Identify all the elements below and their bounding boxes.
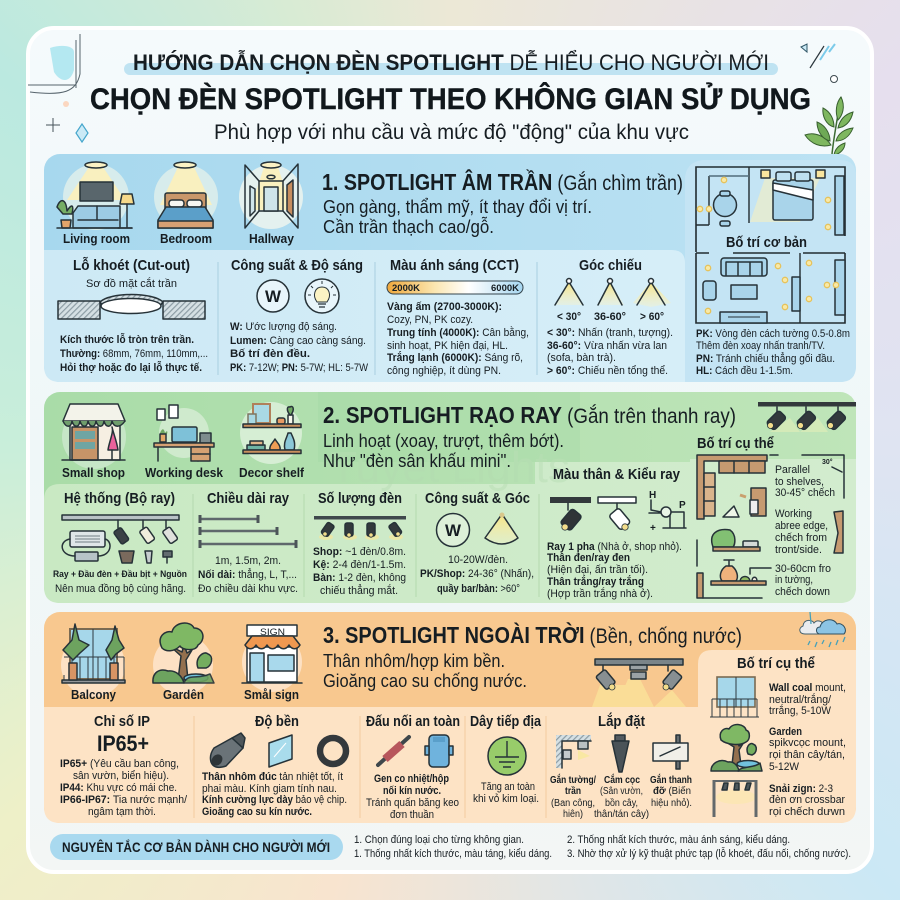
labels: beam angles [557,311,664,323]
text: safe connection: nối kín nước. [383,785,441,797]
text: number of lights: chiếu thẳng mắt. [320,584,398,597]
text: beam angle [547,327,673,377]
text: specific layout notes: to shelves, [775,476,824,488]
icon: decor shelf [240,402,302,464]
icon: leaf branch [805,97,853,155]
text: power and angle: 10-20W/đèn. [448,554,508,566]
column: number of lights [313,490,406,597]
icon: wiring [649,490,686,534]
text: ip rating: IP66-IP67: Tia nước mạnh/ [60,794,188,806]
icon: balcony [61,624,125,697]
text: ip rating: ngâm tạm thời. [88,806,156,818]
labels: beam angles: > 60° [640,311,664,323]
cct colour bar [387,281,523,294]
label: living room: Living room [63,231,130,246]
text: beam angle: > 60°: Chiếu nền tổng thể. [547,365,668,377]
text: section 1 intro: Cần trần thạch cao/gỗ. [323,216,494,237]
heading: cut-out: Lỗ khoét (Cut-out) [73,257,190,274]
icon: wiring: H [649,490,656,501]
footer pill: NGUYÊN TẮC CƠ BẢN DÀNH CHO NGƯỜI MỚI [62,838,330,855]
labels: beam angles: 36-60° [594,311,626,323]
text: safe connection [366,773,459,821]
icons: connectors [378,735,453,767]
panel: outdoor spotlight [44,612,856,823]
text: install: (Sân vườn, [600,786,643,797]
text: layout notes: trrắng, 5-10W [769,704,831,717]
sub panel: specs [44,250,685,382]
text: layout notes: PK: Vòng đèn cách tường 0.5-0.8m [696,328,850,340]
icon: garden [153,623,214,695]
text: power: Bố trí đèn đều. [230,348,310,360]
text: safe connection: đơn thuần [390,809,434,821]
icon: beam cone [485,512,518,544]
text: power [230,321,368,374]
icon: black fixture [550,497,591,531]
text: section 2 intro [323,431,564,471]
text: number of lights: Bàn: 1-2 đèn, không [313,572,406,584]
label: small shop: Small shop [62,465,125,480]
text: beam angle: 36-60°: Vừa nhấn vừa lan [547,340,667,352]
text: durability [202,771,347,818]
labels: beam angles: < 30° [557,311,581,323]
text: specific layout notes: 30-45° chếch [775,487,835,499]
text: section 2 intro: Linh hoạt (xoay, trượt, thêm bớt). [323,431,564,451]
heading block [90,49,811,144]
text: cut-out: Thường: 68mm, 76mm, 110mm,... [60,348,208,360]
subtitle: Phù hợp với nhu cầu và mức độ "động" của khu vực [214,121,689,144]
text: durability: phai màu. Kính giam tính nau. [202,783,337,795]
text: specific layout notes: abree edge, [775,520,828,532]
text: power and angle: quầy bar/bàn: >60° [437,583,520,595]
heading: section 3: 3. SPOTLIGHT NGOÀI TRỜI (Bền, chống nước) [323,621,742,648]
panel: recessed spotlight [44,154,856,382]
text: install: trần [565,785,581,797]
text: durability: Thân nhôm đúc tản nhiệt tốt, ít [202,771,344,783]
text: install: (Ban công, [551,798,595,809]
text: specific layout notes: tront/side. [775,544,822,556]
column: cut-out [58,257,208,374]
text: track length: Nối dài: thẳng, L, T,... [198,568,297,581]
icon: living room [57,162,134,230]
column: durability: Độ bền [255,713,299,730]
label: balcony: Balcony [71,687,117,702]
footer tips: 3. Nhờ thợ xử lý kỹ thuật phức tạp (lỗ khoét, đấu nối, chống nước). [567,847,851,860]
decoration: top-left lines [28,34,80,107]
icon: bedroom [154,162,218,229]
column: ip rating: Chỉ số IP [94,713,150,730]
column: track length [198,490,298,595]
icon: wiring: P [679,500,686,511]
kicker: HƯỚNG DẪN CHỌN ĐÈN SPOTLIGHT DỄ HIỂU CHO NGƯỜI MỚI [133,49,769,75]
column: track system: Hệ thống (Bộ ray) [64,490,175,507]
column: power: Công suất & Độ sáng [231,257,363,274]
diagram: shelf layout [697,455,844,553]
text: safe connection: Tránh quấn băng keo [366,797,459,809]
text: cut-out: Kích thước lỗ tròn trên trần. [60,333,194,346]
footer tips [354,834,851,860]
heading: specific layout: Bố trí cụ thể [697,435,774,452]
column: power and angle: Công suất & Góc [425,490,530,507]
footer [50,834,851,860]
icon: small sign: SIGN [260,627,285,637]
title: CHỌN ĐÈN SPOTLIGHT THEO KHÔNG GIAN SỬ DỤNG [90,82,811,116]
text: cut-out: Hỏi thợ hoặc đo lại lỗ thực tế. [60,361,202,374]
icon: watt: W [265,287,282,306]
text: layout notes: neutral/trắng/ [769,693,832,706]
text: power and angle: PK/Shop: 24-36° (Nhấn), [420,568,534,580]
icon: white fixture [598,497,636,531]
label: garden: Gardên [163,687,204,702]
text: cct: Trắng lạnh (6000K): Sáng rõ, [387,351,523,364]
icon: ground spike [612,735,629,772]
column: installation [550,712,692,820]
column: power [230,257,368,374]
text: durability: Gioăng cao su kín nước. [202,806,312,818]
column: cct [387,257,529,377]
text: section 3 intro [323,651,527,691]
column: safe connection: Đấu nối an toàn [366,713,460,730]
text: power and angle [420,554,534,595]
text: layout notes [696,328,850,377]
column: installation: Lắp đặt [598,712,645,730]
text: install: bồn cây, [605,797,638,809]
text: beam angle: (sofa, bàn trà). [547,352,616,364]
text: track system [53,569,187,595]
text: safe connection: Gen co nhiệt/hộp [374,773,449,785]
text: power: W: Ước lượng độ sáng. [230,321,337,333]
text: section 1 intro: Gọn gàng, thẩm mỹ, ít thay đổi vị trí. [323,197,592,217]
text: durability: Kính cường lực dày bảo vệ chip. [202,794,347,806]
column: cct: Màu ánh sáng (CCT) [390,257,519,274]
icon: track lengths [200,515,296,548]
column: beam angle [547,257,673,377]
text: specific layout notes: 30-60cm fro [775,563,831,575]
column: cut-out: Sơ đồ mặt cắt trần [86,277,177,290]
icon: track with spotlights [758,402,856,432]
footer tips: 1. Thống nhất kích thước, màu táng, kiểu dáng. [354,848,552,860]
label: hallway: Hallway [249,231,295,246]
text: track length: Đo chiều dài khu vực. [198,583,298,595]
text: install: hiệu nhỏ). [651,797,692,809]
icon: sign bar [653,735,688,769]
text: install: đỡ (Biến [653,785,691,797]
column: beam angle: Góc chiếu [579,257,642,274]
footer pill [50,834,343,860]
decoration: top-right marks [801,44,838,82]
text: power: Lumen: Càng cao càng sáng. [230,335,366,347]
icon: balcony layout [710,677,759,717]
icons: durable materials [209,733,346,768]
icon: bulb [305,279,339,313]
icon: hallway [239,162,303,229]
watermark: Tuyet Lights [330,443,570,492]
text: ip rating: IP44: Khu vực có mái che. [60,782,177,794]
text: beam angle: < 30°: Nhấn (tranh, tượng). [547,327,673,339]
subtitle band [124,63,778,75]
text: layout notes: Garden [769,726,802,738]
sub panel: specs [44,707,700,823]
icon: garden layout [711,725,762,771]
text: install: Cắm cọc [604,773,640,786]
lights [721,177,727,183]
diagram: shelf layout: 30° [822,458,833,466]
text: body colour: Ray 1 pha (Nhà ở, shop nhỏ). [547,541,682,553]
icon: ground symbol [488,737,526,775]
text: cct: sinh hoạt, PK hiện đại, HL. [387,340,508,352]
column: body colour: Màu thân & Kiểu ray [553,466,681,483]
text: layout notes: HL: Cách đều 1-1.5m. [696,365,793,377]
sub panel: layout [685,160,856,382]
text: layout notes: Wall coal mount, [769,682,846,694]
text: layout notes: Thêm đèn xoay nhấn tranh/TV. [696,340,825,352]
text: specific layout notes: Working [775,508,812,520]
text: install: hiên) [563,809,583,820]
text: cct: công nghiệp, ít dùng PN. [387,365,501,377]
diagram: low table [697,560,771,598]
text: number of lights: Shop: ~1 đèn/0.8m. [313,546,406,558]
icon: four lights [314,516,406,540]
text: cct: Vàng ấm (2700-3000K): [387,301,502,313]
text: section 3 intro: Thân nhôm/hợp kim bền. [323,651,505,671]
text: install: thân/tán cây) [594,809,649,820]
text: body colour: (Hợp trần trắng nhà ở). [547,587,653,600]
text: cct [387,301,529,377]
living [721,258,767,276]
panel: track spotlight [44,392,856,603]
footer tips: 2. Thống nhất kích thước, màu ánh sáng, kiểu dáng. [567,834,790,846]
text: specific layout notes: chếch down [775,586,830,598]
text: install: Gắn thanh [650,773,692,786]
column: number of lights: Số lượng đèn [318,490,402,507]
text: ground wire: Tăng an toàn [481,781,535,793]
icon: small sign [242,625,302,692]
icon: outdoor fixture [592,659,686,707]
text: section 3 intro: Gioăng cao su chống nước. [323,671,527,691]
bed [773,180,813,220]
text: body colour: (Hiện đại, ấn trần tối). [547,564,648,576]
text: body colour: Thân trắng/ray trắng [547,575,644,588]
text: power: PK: 7-12W; PN: 5-7W; HL: 5-7W [230,362,368,374]
text: ip rating: sân vườn, biển hiệu). [73,770,169,782]
dining [714,194,736,216]
icon: watt: W [445,521,462,540]
text: install: Gắn tường/ [550,773,596,786]
text: ip rating [60,758,188,818]
icon: track kit [62,515,179,563]
heading: section 2: 2. SPOTLIGHT RẠO RAY (Gắn trên thanh ray) [323,402,736,428]
icon: wiring: + [650,523,656,534]
text: cct: Trung tính (4000K): Cân bằng, [387,326,529,339]
watermark [318,392,580,492]
cct colour bar: 2000K [392,283,420,294]
text: layout notes: rọi thân cây/tán, [769,749,845,761]
text: layout notes: spikvcọc mount, [769,737,846,749]
icon: rain clouds [800,612,845,647]
icon: working desk [154,405,214,461]
label: working desk: Working desk [145,465,224,480]
label: small sign: Smål sign [244,687,299,702]
text: number of lights: Kệ: 2-4 đèn/1-1.5m. [313,559,406,571]
cct colour bar: 6000K [491,283,519,294]
column: ground wire: Dây tiếp địa [470,713,542,730]
label: decor shelf: Decor shelf [239,465,305,480]
heading: basic layout: Bố trí cơ bản [726,234,807,251]
column: safe connection [366,713,460,821]
heading: specific layout: Bố trí cụ thể [737,655,815,672]
text: install [550,773,692,820]
text: ground wire [473,781,539,805]
text: layout notes: PN: Tránh chiếu thẳng gối đầu. [696,352,835,365]
column: body colour [547,466,686,600]
icon: wall mount [556,735,591,768]
text: specific layout notes: chếch from [775,532,827,544]
decoration: sparkles left [46,118,88,142]
text: specific layout notes: Parallel [775,464,810,476]
text: track system: Ray + Đầu đèn + Đầu bịt + Nguồn [53,569,187,580]
text: layout notes [769,682,846,818]
column: power and angle [420,490,534,595]
column: ip rating [60,713,188,818]
icon: small shop [62,404,126,469]
text: cct: Cozy, PN, PK cozy. [387,314,473,326]
text: section 1 intro [323,197,592,237]
text: track length [198,555,298,595]
column: track length: Chiều dài ray [207,490,290,507]
text: body colour: Thân đen/ray đen [547,552,630,564]
text: layout notes: Snải zign: 2-3 [769,783,833,795]
heading: section 1: 1. SPOTLIGHT ÂM TRẦN (Gắn chìm trần) [322,168,683,195]
diagram: desk layout [697,530,760,566]
floor plan [696,167,845,323]
icon: crossbar layout [714,780,756,817]
column: ground wire [470,713,542,805]
text: specific layout notes: in tường, [775,574,813,586]
text: layout notes: đèn ơn crossbar [769,794,845,806]
column: track system [53,490,187,595]
text: cut-out [60,333,208,374]
icons: beam cones [555,278,671,307]
text: ip rating: IP65+ (Yêu cầu ban công, [60,758,179,770]
footer tips: 1. Chọn đúng loại cho từng không gian. [354,834,524,846]
column: durability [202,713,347,818]
text: layout notes: 5-12W [769,761,799,773]
text: body colour [547,541,682,600]
text: track system: Nên mua đồng bộ cùng hãng. [55,583,186,595]
text: layout notes: rọi chếch dưwn [769,806,845,818]
text: ground wire: khi vỏ kim loại. [473,793,539,805]
text: section 2 intro: Như "đèn sân khấu mini". [323,451,511,471]
label: bedroom: Bedroom [160,231,212,246]
diagram: ceiling section [58,294,205,319]
text: track length: 1m, 1.5m, 2m. [215,555,281,567]
text: specific layout notes [775,464,835,598]
big label: ip65: IP65+ [97,731,149,756]
text: number of lights [313,546,406,597]
sub panel: layout [698,650,856,823]
sub panel: specs [44,459,856,603]
